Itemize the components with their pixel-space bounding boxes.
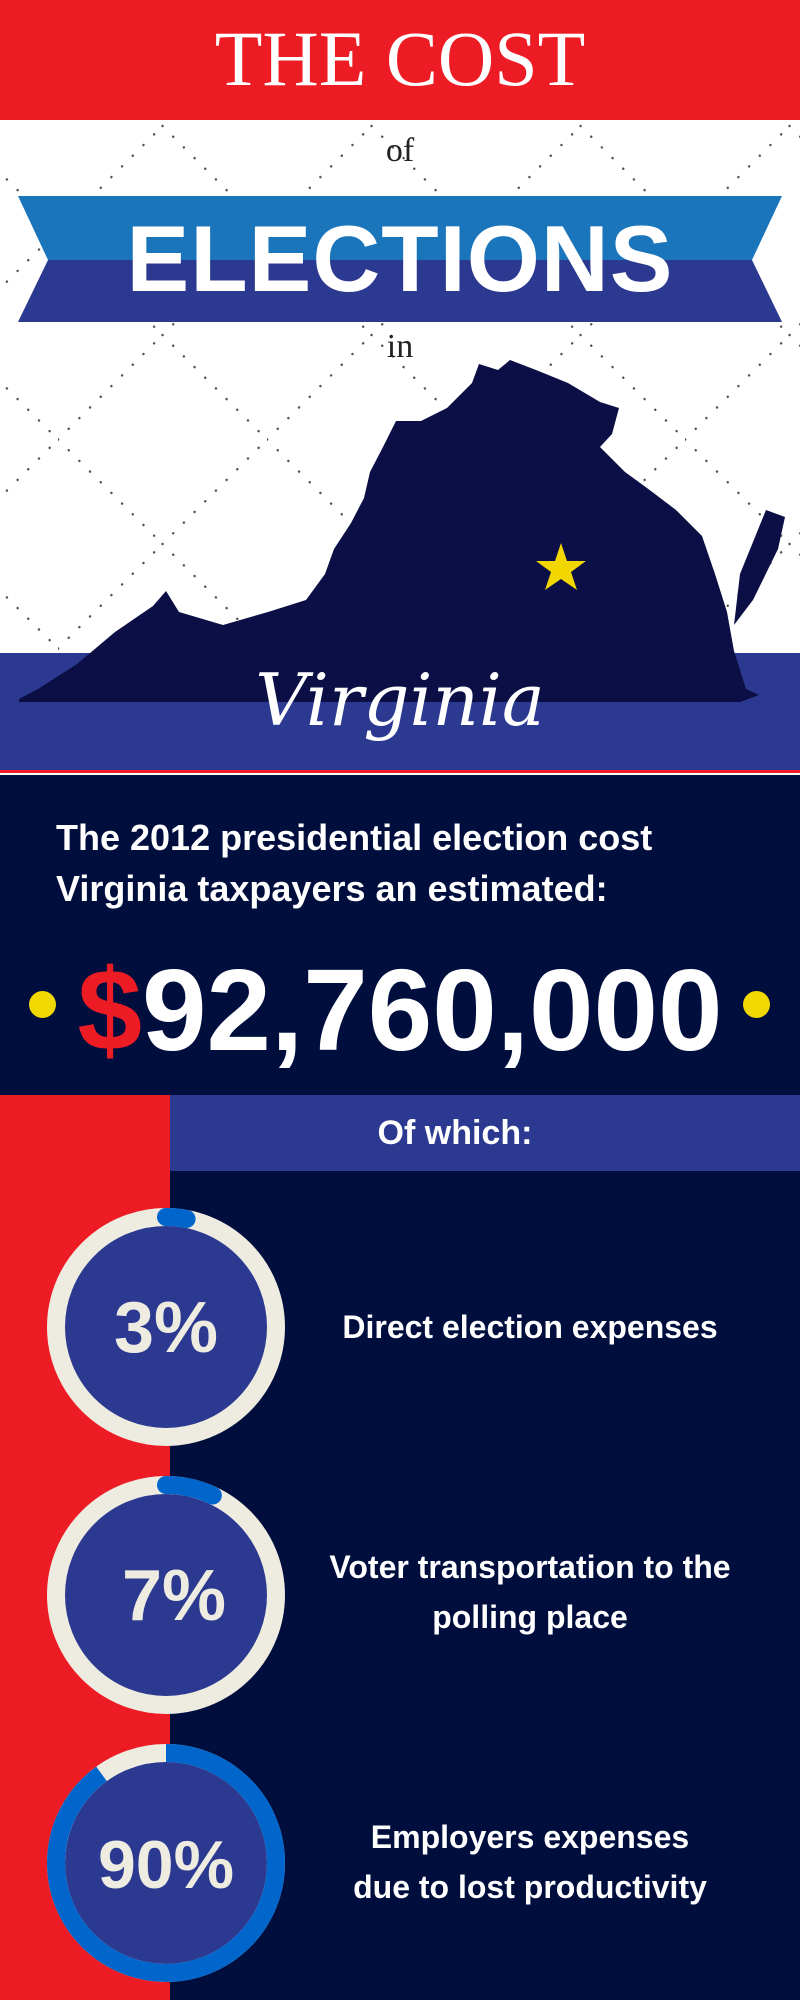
ribbon title: ELECTIONS (127, 206, 673, 311)
label: employers: Employers expenses (371, 1819, 689, 1855)
panel: total cost (0, 775, 800, 1095)
chart: 7%: 7% (122, 1556, 226, 1636)
intro text: Virginia taxpayers an estimated: (56, 868, 608, 909)
chart: 7% (47, 1476, 285, 1714)
chart: 3% (47, 1208, 285, 1446)
of: of (386, 132, 414, 169)
chart: 3%: 3% (114, 1288, 218, 1368)
label: transport (329, 1549, 731, 1635)
background pattern (6, 124, 800, 650)
title text: THE COST (215, 15, 585, 102)
label: direct: Direct election expenses (342, 1309, 718, 1345)
icon: dots (29, 991, 56, 1018)
icon: star (536, 543, 586, 590)
amount: $92,760,000 (77, 945, 723, 1075)
blue band (0, 653, 800, 773)
title bar (0, 0, 800, 120)
label: employers: due to lost productivity (353, 1869, 707, 1905)
intro text (56, 817, 652, 909)
red column (0, 1095, 170, 2000)
intro text: The 2012 presidential election cost (56, 817, 652, 858)
label: transport: Voter transportation to the (329, 1549, 731, 1585)
map of Virginia (19, 360, 785, 702)
Virginia script: Virginia (255, 658, 545, 742)
label: employers (353, 1819, 707, 1905)
chart: 90%: 90% (98, 1827, 234, 1903)
panel: breakdown (0, 1095, 800, 2000)
heading: Of which: Of which: (378, 1114, 532, 1152)
label: transport: polling place (432, 1599, 628, 1635)
chart: 90% (47, 1744, 285, 1982)
in: in (387, 328, 413, 365)
ribbon: ELECTIONS (18, 196, 782, 322)
heading: Of which (170, 1095, 800, 1171)
